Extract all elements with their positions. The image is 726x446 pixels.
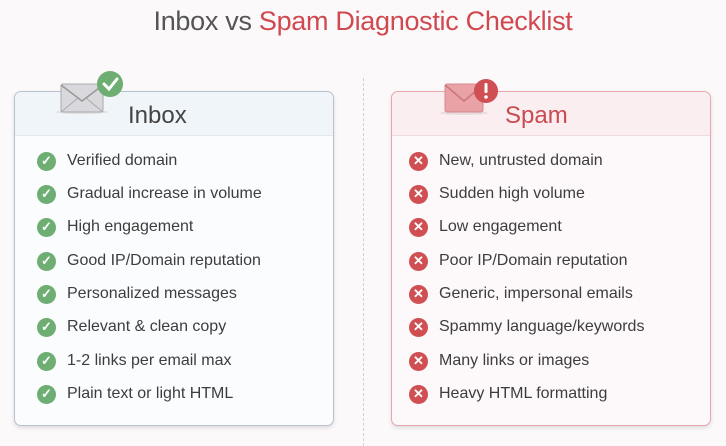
item 1: ✕ [413, 153, 424, 168]
heading: inbox: Inbox [128, 102, 187, 129]
item 6: Spammy language/keywords [439, 318, 644, 335]
item 8: ✕ [413, 386, 424, 401]
item 7: ✕ [413, 353, 424, 368]
heading: spam: Spam [505, 102, 568, 129]
item 2: Gradual increase in volume [67, 185, 262, 202]
panel: spam [391, 91, 711, 426]
item 3: ✓ [41, 219, 52, 234]
item 3: ✕ [413, 219, 424, 234]
item 6: ✕ [413, 319, 424, 334]
spam header [392, 92, 710, 136]
item 8: Plain text or light HTML [67, 385, 233, 402]
item 1: ✓ [41, 153, 52, 168]
item 3: Low engagement [439, 218, 562, 235]
icon: spam envelope with alert [440, 79, 498, 115]
item 4: Poor IP/Domain reputation [439, 252, 628, 269]
item 5: Personalized messages [67, 285, 237, 302]
item 6: ✓ [41, 319, 52, 334]
item 1: Verified domain [67, 152, 177, 169]
item 8: ✓ [41, 386, 52, 401]
item 4: ✕ [413, 253, 424, 268]
divider [363, 78, 364, 446]
item 4: Good IP/Domain reputation [67, 252, 261, 269]
item 6: Relevant & clean copy [67, 318, 226, 335]
item 5: ✓ [41, 286, 52, 301]
title: Inbox vs Spam Diagnostic Checklist [154, 6, 572, 36]
icon: inbox envelope with check [56, 71, 123, 114]
item 2: ✕ [413, 186, 424, 201]
panel: inbox [14, 91, 334, 426]
item 3: High engagement [67, 218, 193, 235]
item 1: New, untrusted domain [439, 152, 603, 169]
item 7: ✓ [41, 353, 52, 368]
item 5: ✕ [413, 286, 424, 301]
item 7: Many links or images [439, 352, 589, 369]
item 5: Generic, impersonal emails [439, 285, 633, 302]
item 2: ✓ [41, 186, 52, 201]
item 4: ✓ [41, 253, 52, 268]
item 8: Heavy HTML formatting [439, 385, 607, 402]
inbox header [15, 92, 333, 136]
item 2: Sudden high volume [439, 185, 585, 202]
item 7: 1-2 links per email max [67, 352, 232, 369]
